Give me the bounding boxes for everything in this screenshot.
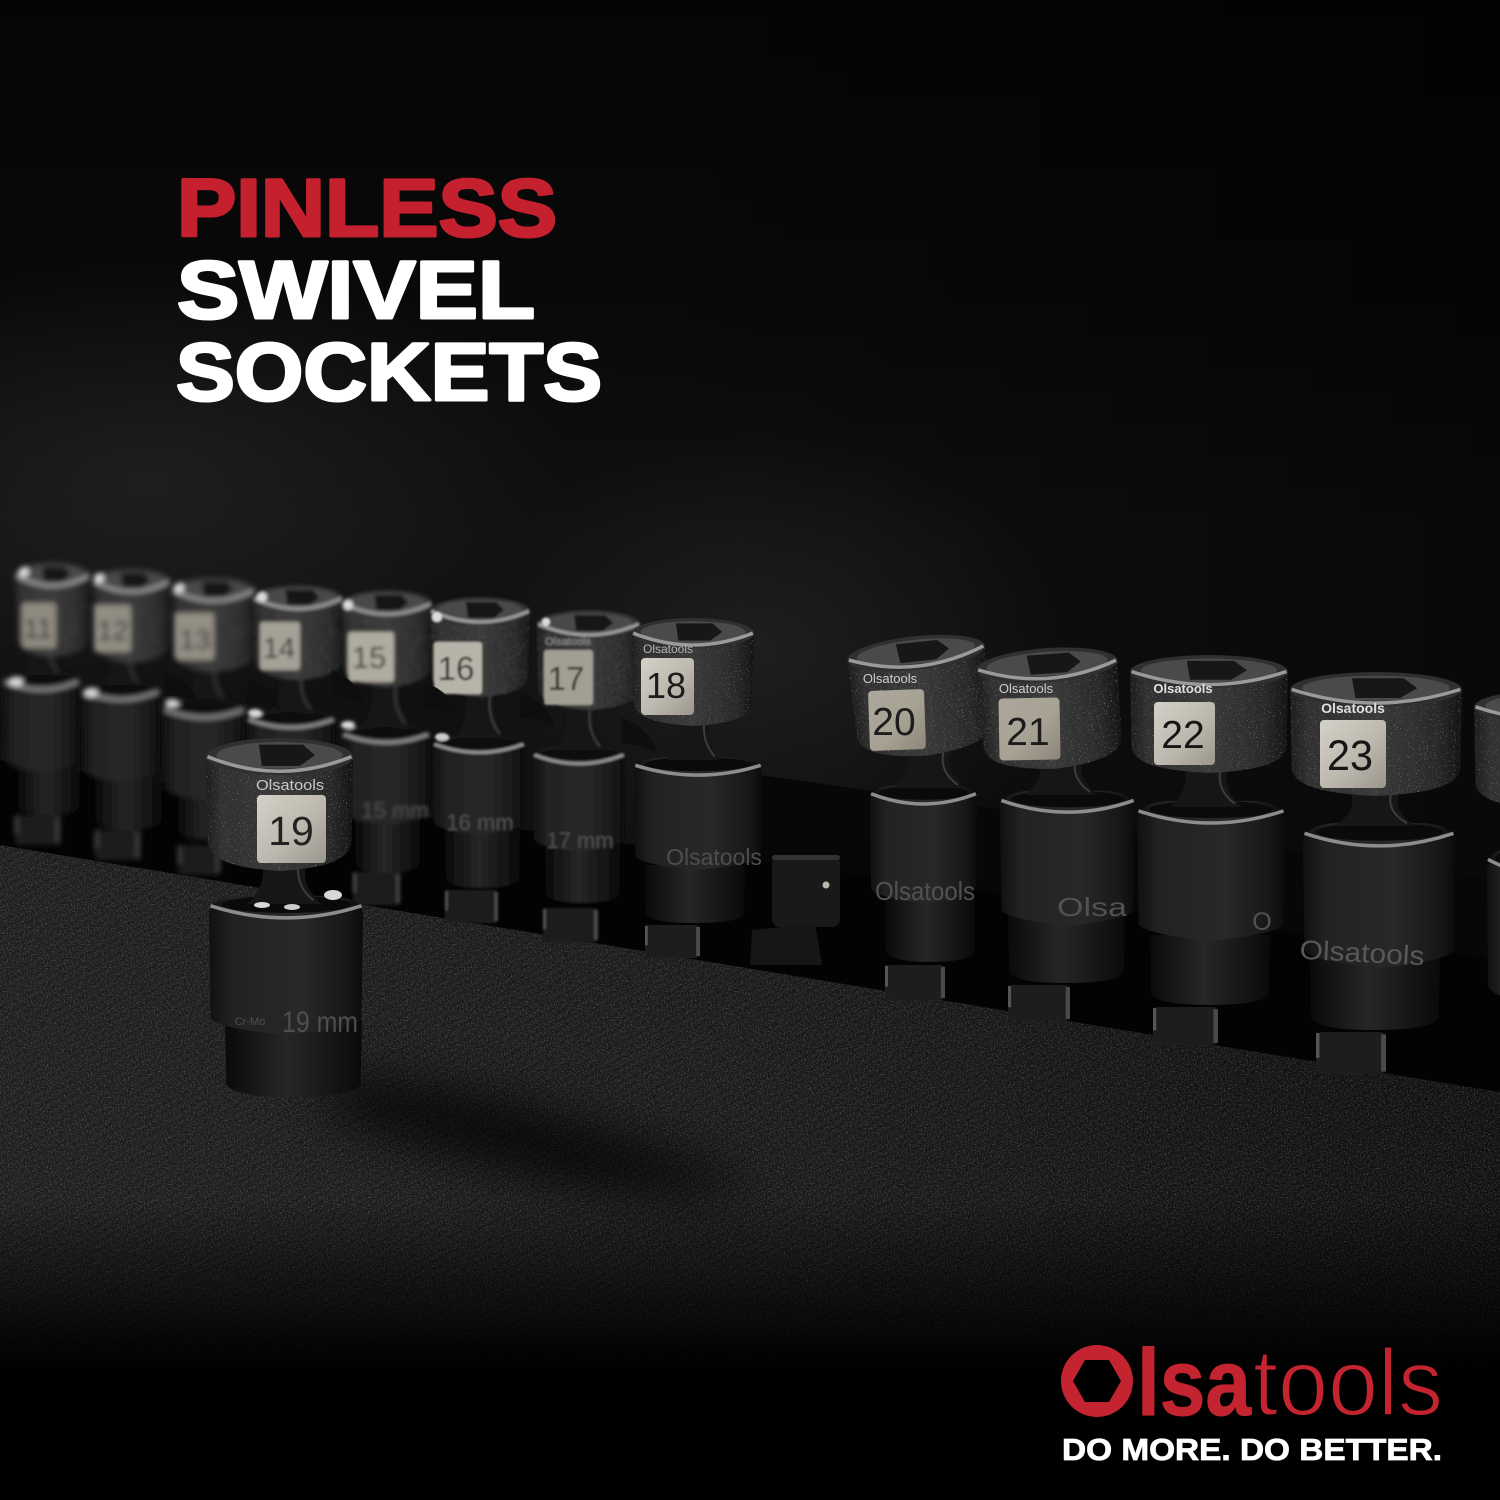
socket 23: Olsatools: [1321, 700, 1385, 716]
distant sockets 11 to 17 on rail: [3, 562, 640, 942]
socket 15: 15: [352, 640, 386, 675]
socket 17: 17: [548, 660, 584, 697]
socket 21: 21: [1006, 711, 1050, 754]
logo wordmark: tools: [1253, 1330, 1443, 1436]
socket 22: Olsatools: [1153, 681, 1213, 696]
socket 18: 18: [646, 665, 686, 706]
socket 20: Olsatools: [875, 876, 975, 906]
socket 19 standing on table: 19: [268, 808, 314, 854]
logo wordmark: [1137, 1330, 1443, 1436]
socket 12: [82, 568, 170, 860]
tabs behind heads: [163, 670, 656, 752]
socket 14: [247, 585, 343, 810]
socket 15: 15 mm: [361, 798, 429, 823]
socket 14: 14: [263, 633, 295, 665]
logo wordmark: lsa: [1137, 1330, 1252, 1436]
socket 20: Olsatools: [863, 671, 918, 686]
logo tagline: DO MORE. DO BETTER.: [1062, 1432, 1442, 1467]
socket 19 standing on table: 19 mm: [282, 1006, 358, 1039]
heading line 2: SWIVEL: [177, 245, 535, 336]
wall shadow band: [760, 775, 1500, 1100]
socket 22: O: [1252, 908, 1272, 936]
empty rail adapter: [750, 855, 840, 965]
socket 11: 11: [23, 613, 53, 644]
socket 19 standing on table: Olsatools: [256, 778, 324, 794]
socket 16: 16 mm: [446, 810, 514, 835]
socket 24 partial: [1474, 690, 1500, 1005]
heading line 1: PINLESS: [177, 163, 557, 254]
socket 11: [3, 562, 90, 845]
socket 19 standing on table: Cr-Mo: [235, 1016, 265, 1028]
socket 19 cast shadow: [320, 1075, 760, 1196]
socket 18: Olsatools: [643, 642, 693, 656]
socket 23: [1290, 672, 1462, 1074]
socket 21: [976, 643, 1135, 1021]
brand logo: [1061, 1330, 1443, 1467]
socket 16: [430, 597, 530, 923]
table surface: [0, 840, 1500, 1500]
heading: pinless swivel sockets: [176, 163, 602, 418]
socket 15: [341, 590, 432, 905]
socket 20: [846, 629, 996, 1000]
socket 22: [1130, 655, 1288, 1045]
socket 23: Olsatools: [1299, 935, 1425, 971]
socket 22: 22: [1161, 714, 1205, 757]
socket 13: [163, 577, 255, 875]
socket 20: 20: [872, 701, 916, 744]
socket 17: 17 mm: [546, 828, 614, 853]
heading line 3: SOCKETS: [176, 327, 602, 418]
socket 18: Olsatools: [666, 844, 762, 870]
socket 19 standing on table: [206, 738, 363, 1097]
logo hex O mark: [1061, 1345, 1133, 1417]
socket 16: 16: [438, 650, 474, 687]
socket 21: Olsatools: [999, 681, 1054, 696]
socket 17: Olsatools: [545, 636, 591, 648]
socket 13: 13: [179, 624, 211, 655]
socket 21: Olsa: [1057, 892, 1128, 922]
socket 12: 12: [97, 615, 129, 646]
socket 18: [632, 618, 762, 958]
socket 17: [533, 610, 640, 942]
socket 23: 23: [1327, 732, 1373, 780]
storage rail: [0, 760, 1500, 1092]
